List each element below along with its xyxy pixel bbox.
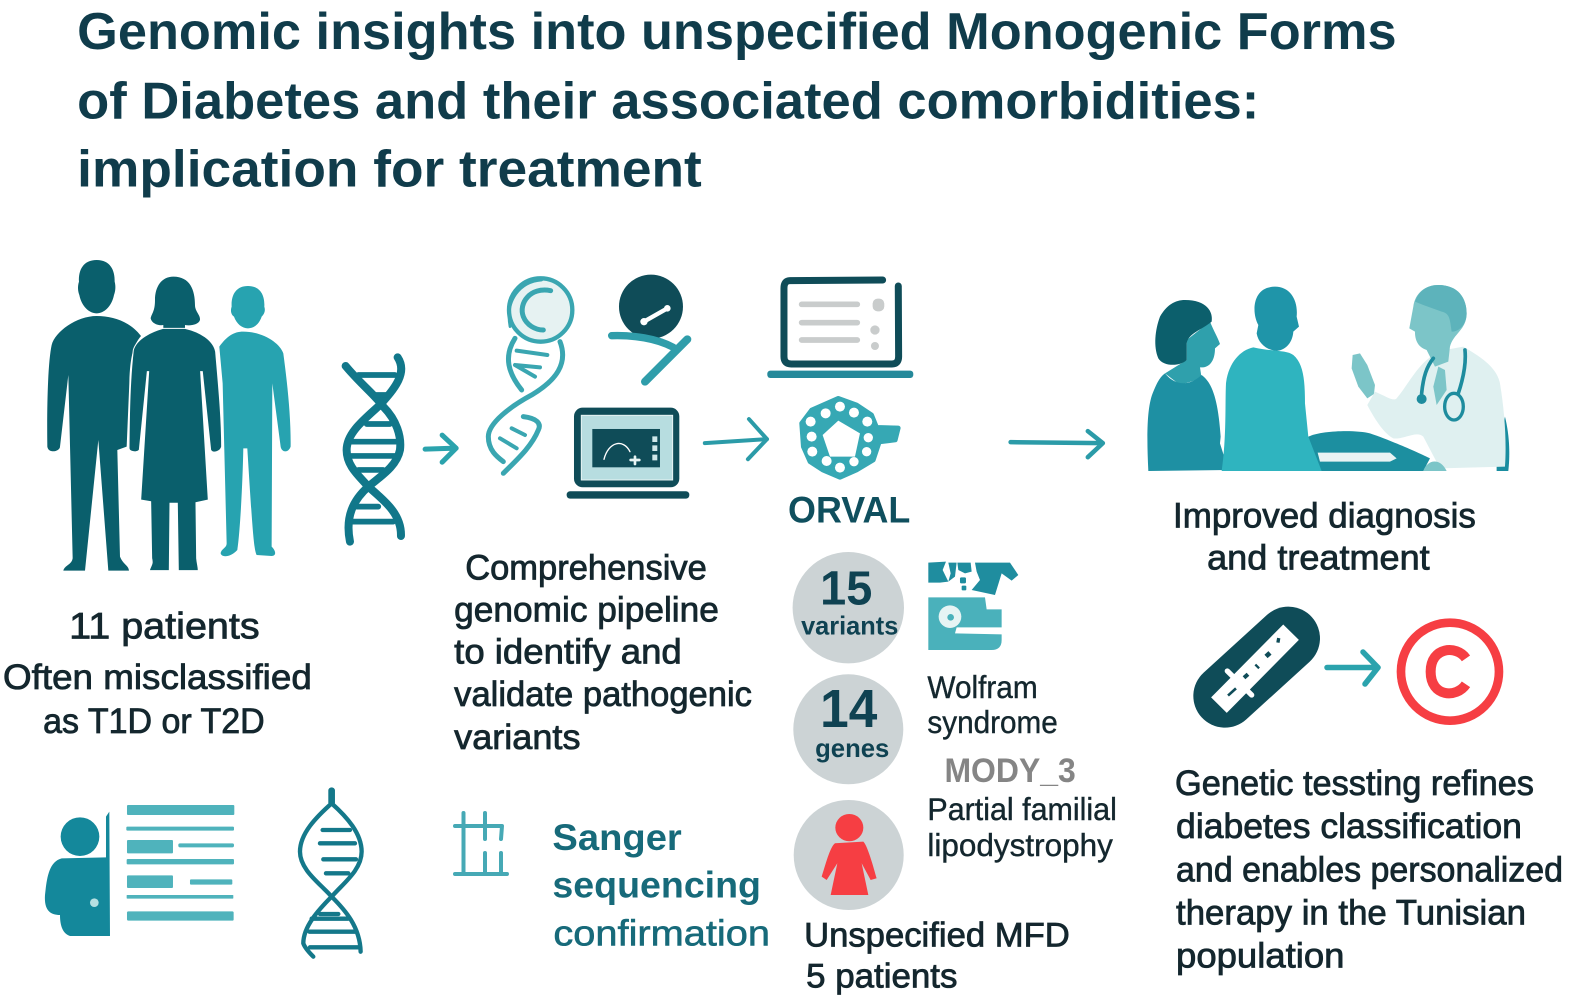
text: 11 patients: Often misclassified bbox=[3, 658, 312, 697]
text: Unspecified MFD 5 patients: Unspecified MFD bbox=[804, 916, 1070, 954]
stat: 15 variants: 15 bbox=[820, 562, 872, 616]
icon: DNA helix lower bbox=[300, 791, 362, 957]
text: conclusion bbox=[1175, 764, 1563, 976]
text: Partial familial lipodystrophy bbox=[927, 792, 1117, 863]
text: Partial familial lipodystrophy: lipodystrophy bbox=[927, 828, 1113, 863]
icon: DNA helix upper bbox=[346, 357, 401, 542]
icon: cell blocks bbox=[928, 562, 1018, 650]
text: 11 patients bbox=[3, 605, 312, 741]
stat: 15 variants bbox=[793, 552, 904, 663]
text: pipeline description: to identify and bbox=[454, 633, 682, 672]
icon: dark disc with tool bbox=[612, 275, 687, 382]
text: pipeline description: variants bbox=[454, 718, 581, 757]
title: of Diabetes and their associated comorbidities: bbox=[77, 72, 1259, 130]
panel: statistics bbox=[793, 552, 1117, 996]
text: improved diagnosis: Improved diagnosis bbox=[1173, 496, 1476, 535]
label: ORVAL: ORVAL bbox=[788, 488, 910, 530]
text: conclusion: population bbox=[1176, 937, 1344, 976]
icon: sequencing gel bbox=[455, 813, 507, 874]
text: Unspecified MFD 5 patients bbox=[804, 916, 1070, 996]
icon: magnifier and DNA bbox=[488, 278, 572, 473]
arrow: DNA to pipeline bbox=[425, 435, 456, 462]
text: Sanger sequencing confirmation: Sanger bbox=[552, 816, 682, 858]
text: pipeline description: validate pathogenic bbox=[454, 675, 752, 714]
illustration: doctor consulting patients bbox=[1147, 285, 1509, 471]
text: MODY_3: MODY_3 bbox=[944, 752, 1076, 790]
icon: three people silhouettes bbox=[47, 260, 291, 571]
title: implication for treatment bbox=[77, 140, 702, 198]
title: Genomic insights into unspecified Monogenic Forms bbox=[77, 3, 1397, 61]
panel: ORVAL bbox=[767, 280, 913, 530]
text: 11 patients: as T1D or T2D bbox=[43, 702, 265, 741]
text: pipeline description: genomic pipeline bbox=[454, 591, 719, 630]
icon: red circled C bbox=[1401, 623, 1499, 721]
icon: analysis laptop bbox=[567, 408, 689, 499]
text: improved diagnosis bbox=[1173, 496, 1476, 577]
text: Sanger sequencing confirmation: sequencing bbox=[552, 863, 761, 905]
stat: 15 variants: variants bbox=[801, 611, 898, 641]
stat: 14 genes: 14 bbox=[820, 679, 877, 739]
stat: patient figure bbox=[794, 800, 904, 910]
text: conclusion: therapy in the Tunisian bbox=[1176, 893, 1526, 932]
text: Wolfram syndrome: syndrome bbox=[927, 705, 1058, 740]
stat: 14 genes bbox=[793, 674, 903, 784]
panel: Sanger sequencing bbox=[455, 813, 770, 953]
icon: report laptop bbox=[767, 280, 913, 378]
icon: person with report bbox=[45, 805, 234, 936]
text: pipeline description bbox=[454, 549, 752, 757]
text: Partial familial lipodystrophy: Partial familial bbox=[927, 792, 1117, 827]
text: Unspecified MFD 5 patients: 5 patients bbox=[806, 958, 957, 996]
text: Sanger sequencing confirmation bbox=[552, 816, 770, 953]
panel: patients bbox=[3, 260, 312, 936]
arrow: ORVAL to outcome bbox=[1011, 431, 1103, 457]
panel: outcomes bbox=[1147, 285, 1563, 976]
panel: genomic pipeline bbox=[454, 275, 752, 757]
icon: ORVAL network logo bbox=[802, 398, 898, 477]
stat: 14 genes: genes bbox=[815, 733, 889, 763]
text: 11 patients: 11 patients bbox=[69, 605, 260, 647]
arrow: test to result bbox=[1327, 652, 1378, 684]
title bbox=[77, 3, 1397, 198]
text: Wolfram syndrome: Wolfram bbox=[927, 670, 1038, 705]
text: improved diagnosis: and treatment bbox=[1207, 538, 1430, 577]
text: conclusion: Genetic tessting refines bbox=[1175, 764, 1534, 803]
icon: test strip capsule bbox=[1225, 638, 1288, 697]
text: pipeline description: Comprehensive bbox=[465, 549, 707, 588]
text: conclusion: diabetes classification bbox=[1176, 807, 1522, 846]
text: Wolfram syndrome bbox=[927, 670, 1058, 740]
text: conclusion: and enables personalized bbox=[1176, 850, 1563, 889]
text: Sanger sequencing confirmation: confirmation bbox=[553, 912, 770, 953]
arrow: pipeline to ORVAL bbox=[705, 419, 767, 459]
